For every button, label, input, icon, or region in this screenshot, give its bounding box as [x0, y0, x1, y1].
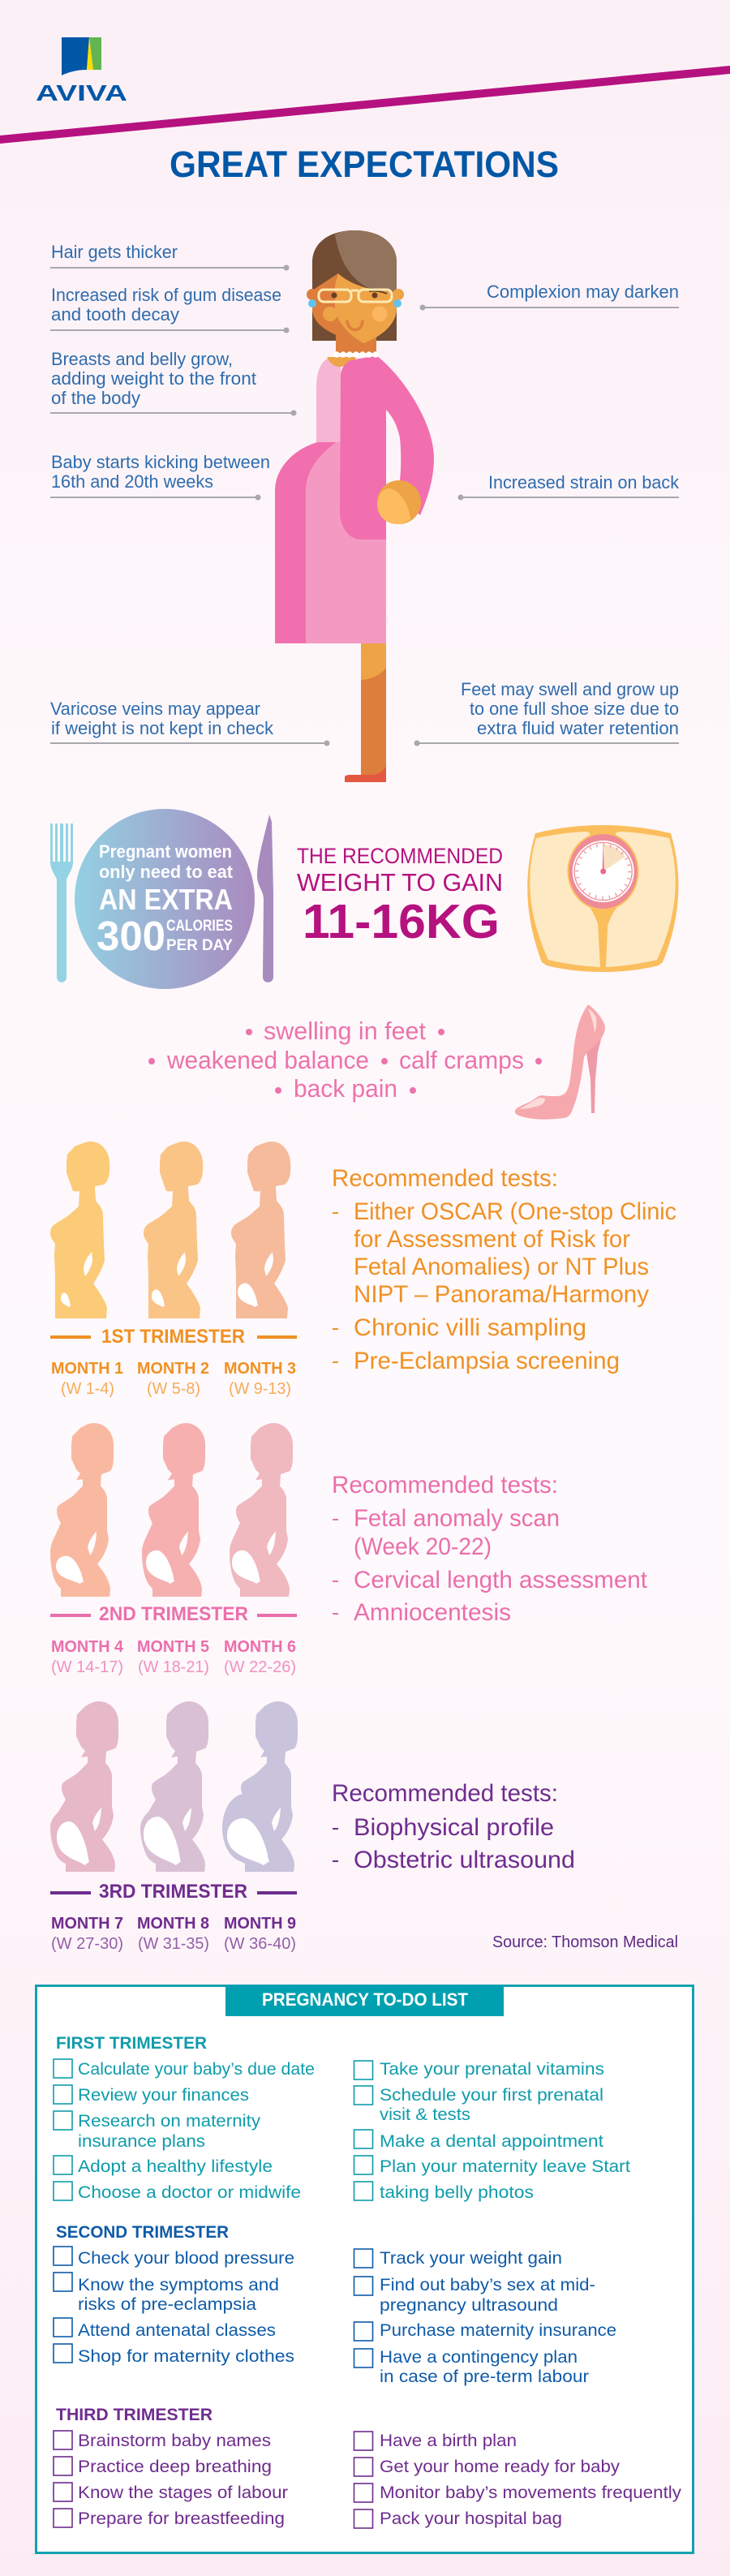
to-do: first trimester: Choose a doctor or midwife [78, 2183, 301, 2202]
to-do: second trimester: in case of pre-term labour [380, 2367, 589, 2386]
to-do: first trimester: Make a dental appointment [380, 2132, 603, 2151]
first trimester months: MONTH 1 [51, 1360, 123, 1378]
to-do: second trimester: Know the symptoms and [78, 2276, 279, 2294]
symptoms list [148, 1017, 542, 1103]
callout: complexion [420, 282, 679, 310]
to-do: second trimester: Purchase maternity insurance [380, 2321, 616, 2340]
to-do: second trimester: SECOND TRIMESTER [56, 2223, 229, 2242]
first trimester months: MONTH 2 [137, 1360, 209, 1378]
to-do: third trimester: Prepare for breastfeeding [78, 2509, 285, 2528]
first trimester months: (W 1-4) [61, 1380, 114, 1398]
calorie plate: PER DAY [166, 937, 233, 954]
second trimester months: (W 14-17) [51, 1658, 123, 1676]
icon: knife [257, 815, 273, 983]
second trimester months: (W 18-21) [138, 1658, 209, 1676]
callout: back strain: Increased strain on back [488, 472, 680, 492]
to-do: first trimester: taking belly photos [380, 2183, 534, 2202]
to-do: first trimester: Adopt a healthy lifestyle [78, 2157, 273, 2176]
calorie plate: CALORIES [166, 918, 233, 935]
third trimester months: MONTH 8 [137, 1915, 209, 1933]
first trimester tests: for Assessment of Risk for [354, 1226, 630, 1253]
second trimester months [51, 1638, 296, 1676]
callout: gum disease: Increased risk of gum disease [51, 285, 281, 305]
calorie plate [75, 809, 255, 989]
to-do: third trimester: Pack your hospital bag [380, 2509, 562, 2528]
second trimester tests: (Week 20-22) [354, 1533, 492, 1560]
second trimester heading: 2ND TRIMESTER [99, 1603, 248, 1625]
third trimester months: MONTH 7 [51, 1915, 123, 1933]
first trimester tests: NIPT – Panorama/Harmony [354, 1281, 649, 1308]
first trimester tests: Either OSCAR (One-stop Clinic [354, 1198, 676, 1225]
callout: complexion: Complexion may darken [487, 282, 679, 302]
callout: breasts and belly: Breasts and belly grow, [51, 349, 233, 369]
second trimester months: MONTH 6 [224, 1638, 296, 1656]
calorie plate: AN EXTRA [99, 883, 233, 916]
pregnant woman illustration [275, 230, 434, 782]
to-do: second trimester: Have a contingency plan [380, 2348, 578, 2367]
second trimester tests: Fetal anomaly scan [354, 1505, 560, 1532]
to-do: second trimester: Find out baby’s sex at mid- [380, 2276, 595, 2294]
source note: Source: Thomson Medical [492, 1933, 678, 1951]
first trimester months: (W 5-8) [147, 1380, 200, 1398]
recommended weight gain [297, 844, 503, 948]
third trimester heading: 3RD TRIMESTER [99, 1881, 247, 1903]
second trimester tests: Recommended tests: [332, 1472, 558, 1499]
to-do: third trimester: THIRD TRIMESTER [56, 2406, 213, 2424]
callout: breasts and belly [50, 349, 297, 415]
to-do: first trimester: FIRST TRIMESTER [56, 2034, 207, 2053]
third trimester tests: Obstetric ultrasound [354, 1847, 575, 1873]
to-do: third trimester: Monitor baby’s movements frequently [380, 2484, 682, 2502]
to-do: second trimester: Track your weight gain [380, 2249, 562, 2268]
first trimester months: (W 9-13) [229, 1380, 291, 1398]
to-do: second trimester: risks of pre-eclampsia [78, 2295, 256, 2314]
recommended weight gain: THE RECOMMENDED [297, 844, 503, 868]
to-do: third trimester: Know the stages of labour [78, 2484, 288, 2502]
callout: baby kicking: 16th and 20th weeks [51, 471, 213, 492]
icon: high heel shoe [515, 1004, 605, 1120]
symptoms list: swelling in feet [264, 1017, 426, 1045]
second trimester months: MONTH 4 [51, 1638, 124, 1656]
to-do: first trimester: Review your finances [78, 2086, 249, 2105]
third trimester tests: Recommended tests: [332, 1780, 558, 1807]
third trimester months [51, 1915, 296, 1953]
callout: baby kicking: Baby starts kicking between [51, 452, 270, 472]
to-do: second trimester: pregnancy ultrasound [380, 2296, 558, 2315]
callout: varicose veins [50, 699, 329, 746]
callout: breasts and belly: adding weight to the front [51, 368, 256, 389]
logo: Aviva: AVIVA [36, 80, 127, 105]
to-do: second trimester: Attend antenatal classes [78, 2321, 276, 2340]
third trimester months: (W 31-35) [138, 1935, 209, 1953]
icon: fork [50, 824, 73, 983]
second trimester tests: Cervical length assessment [354, 1567, 648, 1593]
symptoms list: calf cramps [399, 1046, 524, 1074]
header diagonal band [0, 66, 730, 144]
callout: hair [50, 242, 289, 271]
first trimester months [51, 1360, 296, 1398]
first trimester silhouettes [50, 1142, 290, 1318]
first trimester tests: Fetal Anomalies) or NT Plus [354, 1254, 649, 1280]
recommended weight gain: 11-16KG [303, 895, 500, 948]
first trimester tests: Chronic villi sampling [354, 1314, 586, 1341]
to-do: first trimester: Plan your maternity leave Start [380, 2157, 630, 2176]
to-do: first trimester: Schedule your first prenatal [380, 2086, 603, 2105]
to-do: second trimester: Shop for maternity clothes [78, 2347, 294, 2366]
to-do list header [225, 1985, 504, 2016]
callout: hair: Hair gets thicker [51, 242, 178, 262]
to-do: second trimester [54, 2223, 616, 2386]
callout: feet swell: to one full shoe size due to [470, 699, 679, 719]
calorie plate: Pregnant women [99, 841, 232, 862]
panel: pregnancy to-do list [36, 1985, 693, 2552]
to-do: first trimester: visit & tests [380, 2105, 470, 2124]
calorie plate: only need to eat [99, 862, 234, 882]
callout: gum disease [50, 285, 289, 333]
icon: weighing scale [527, 825, 678, 972]
to-do: first trimester: Research on maternity [78, 2112, 261, 2131]
second trimester tests: Amniocentesis [354, 1599, 511, 1626]
callout: breasts and belly: of the body [51, 388, 140, 408]
to-do: first trimester: Take your prenatal vitamins [380, 2060, 604, 2079]
callout: back strain [457, 472, 680, 500]
to-do: third trimester [54, 2406, 682, 2528]
third trimester months: MONTH 9 [224, 1915, 296, 1933]
first trimester tests: Pre-Eclampsia screening [354, 1348, 620, 1374]
third trimester silhouettes [50, 1701, 298, 1872]
recommended weight gain: WEIGHT TO GAIN [297, 868, 503, 897]
second trimester silhouettes [50, 1423, 293, 1597]
callout: varicose veins: Varicose veins may appear [50, 699, 260, 719]
third trimester months: (W 27-30) [51, 1935, 123, 1953]
first trimester tests [332, 1165, 676, 1374]
logo: Aviva [36, 37, 127, 105]
callout: baby kicking [50, 452, 270, 500]
symptoms list: back pain [294, 1074, 397, 1103]
to-do: third trimester: Brainstorm baby names [78, 2432, 271, 2450]
callout: feet swell: extra fluid water retention [477, 718, 679, 738]
to-do: third trimester: Have a birth plan [380, 2432, 517, 2450]
third trimester tests: Biophysical profile [354, 1814, 554, 1841]
calorie plate: 300 [97, 913, 165, 959]
third trimester tests [332, 1780, 575, 1873]
title: GREAT EXPECTATIONS [170, 144, 559, 185]
callout: varicose veins: if weight is not kept in check [51, 718, 274, 738]
second trimester months: (W 22-26) [224, 1658, 296, 1676]
to-do: first trimester: insurance plans [78, 2132, 205, 2151]
to-do: third trimester: Get your home ready for baby [380, 2458, 620, 2476]
callout: feet swell [414, 679, 679, 746]
first trimester heading: 1ST TRIMESTER [101, 1326, 245, 1348]
first trimester months: MONTH 3 [224, 1360, 296, 1378]
third trimester months: (W 36-40) [224, 1935, 296, 1953]
to-do: second trimester: Check your blood pressure [78, 2249, 294, 2268]
second trimester tests [332, 1472, 648, 1626]
to-do list header: PREGNANCY TO-DO LIST [262, 1989, 469, 2010]
symptoms list: weakened balance [166, 1046, 369, 1074]
to-do: first trimester: Calculate your baby’s due date [78, 2060, 315, 2079]
first trimester tests: Recommended tests: [332, 1165, 558, 1192]
callout: feet swell: Feet may swell and grow up [461, 679, 679, 699]
to-do: first trimester [54, 2034, 630, 2202]
callout: gum disease: and tooth decay [51, 304, 179, 325]
second trimester months: MONTH 5 [137, 1638, 209, 1656]
to-do: third trimester: Practice deep breathing [78, 2458, 272, 2476]
